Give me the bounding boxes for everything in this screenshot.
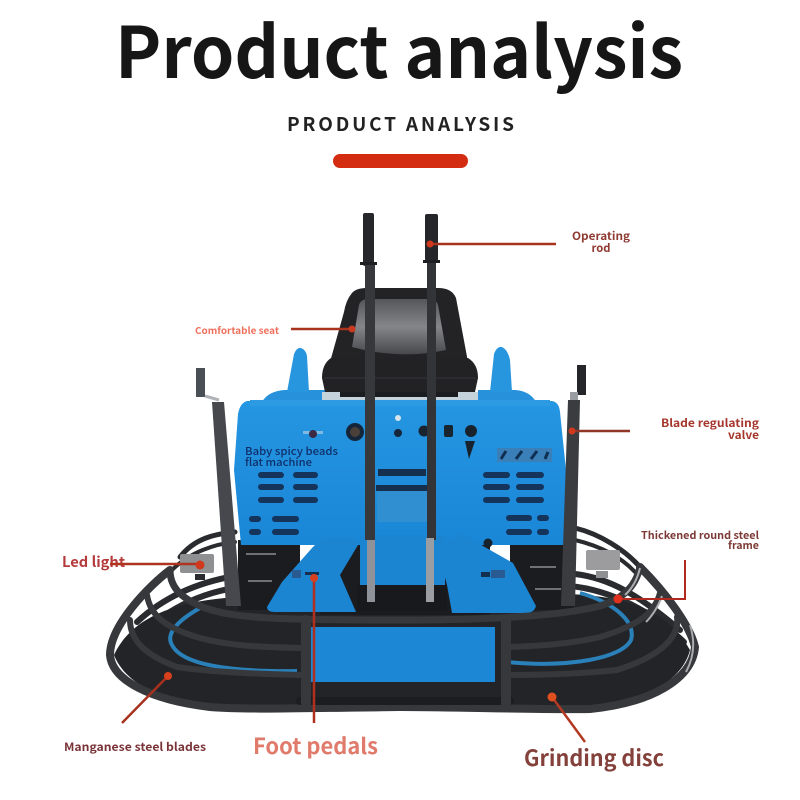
callout: thickened round steel frame: Thickened round steel [641, 528, 760, 543]
central pedal bay [360, 535, 445, 585]
front round frame [110, 567, 695, 709]
left vents [249, 472, 318, 535]
centre hinge bar and sticker [376, 469, 428, 522]
LED lights [180, 550, 620, 580]
callout: comfortable seat: Comfortable seat [195, 323, 279, 337]
callout: foot pedals: Foot pedals [253, 729, 378, 761]
subtitle: PRODUCT ANALYSIS [287, 110, 514, 137]
front blue panel [311, 627, 495, 682]
pedal details [292, 538, 505, 578]
callout: thickened round steel frame [614, 528, 760, 604]
callout: operating rod: rod [592, 240, 610, 256]
machine name label: flat machine [245, 454, 312, 470]
left foot pedal housing [267, 538, 358, 612]
red accent pill [333, 154, 468, 168]
machine name label [245, 443, 338, 470]
callout: thickened round steel frame: frame [728, 538, 759, 553]
rear frame tubes [122, 528, 684, 652]
blade regulating levers [196, 365, 586, 606]
hardware highlights [246, 553, 561, 590]
callout: led light: Led light [62, 551, 125, 572]
callout: led light [62, 551, 204, 572]
callout: manganese steel blades [64, 672, 206, 755]
callout: grinding disc [524, 692, 664, 773]
callout: foot pedals [253, 574, 378, 761]
callout: grinding disc: Grinding disc [524, 741, 664, 773]
hardware behind body [238, 535, 574, 615]
roll bars [287, 347, 512, 392]
callout: blade regulating valve: valve [728, 427, 759, 443]
callout: manganese steel blades: Manganese steel blades [64, 739, 206, 755]
machine illustration [110, 213, 695, 710]
body shoulders [262, 390, 536, 402]
callout: comfortable seat [195, 323, 356, 337]
right vents [483, 472, 549, 535]
frame highlights [625, 568, 693, 672]
right foot pedal housing [437, 533, 536, 613]
callout: blade regulating valve [568, 415, 759, 443]
dark disc underside [114, 590, 690, 710]
control panel dials [303, 415, 552, 462]
seat [322, 288, 478, 400]
operating rods [360, 213, 440, 602]
callout: blade regulating valve: Blade regulating [661, 415, 759, 431]
blue disc rings [170, 593, 632, 671]
machine name label: Baby spicy beads [245, 443, 338, 459]
machine blue body [234, 400, 568, 545]
callout: operating rod: Operating [572, 228, 630, 244]
callout: operating rod [426, 228, 630, 256]
title: Product analysis [115, 0, 683, 99]
